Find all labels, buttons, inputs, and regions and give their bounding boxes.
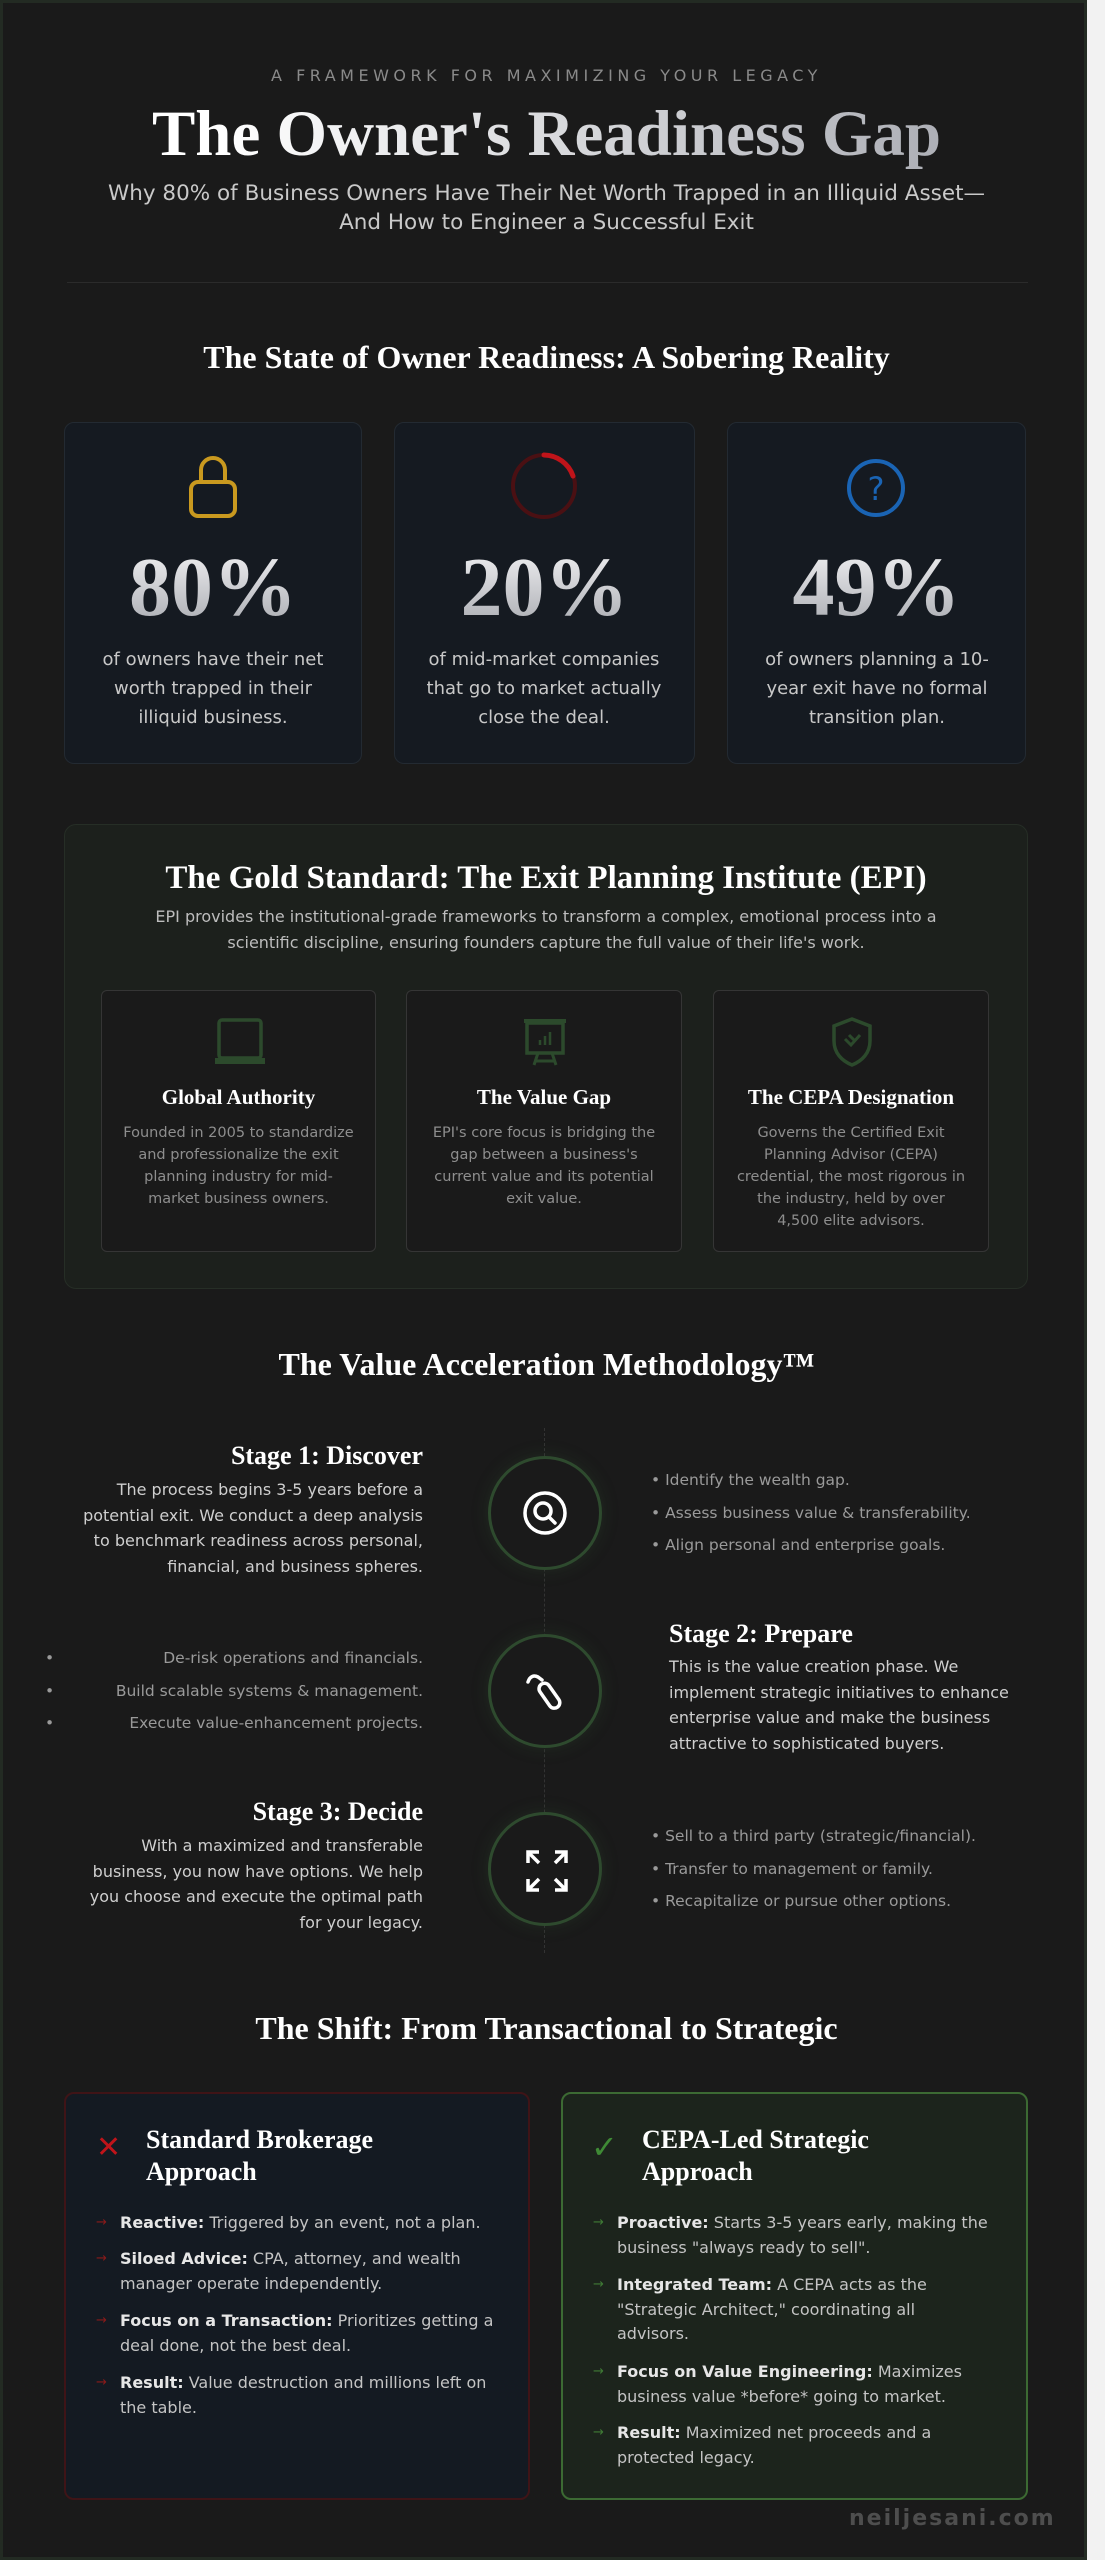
text: of owners have their net worth trapped in their illiquid business. xyxy=(103,649,323,728)
list: stage 2 bullets: • xyxy=(45,1682,54,1700)
subcard: value gap xyxy=(406,990,682,1252)
panel: CEPA-led strategic: Proactive: Starts 3-5 years early, making the business "always ready to sell". xyxy=(617,2213,988,2256)
panel: standard brokerage xyxy=(64,2092,530,2500)
subcard: CEPA designation: Governs the Certified Exit Planning Advisor (CEPA) credential, the most rigorous in the industry, held by over 4,500 elite advisors. xyxy=(737,1125,965,1229)
subtitle xyxy=(108,181,985,235)
list: stage 1 bullets: • Assess business value & transferability. xyxy=(651,1504,971,1522)
list: stage 2 bullets: De-risk operations and financials. xyxy=(163,1649,423,1667)
stat card: 80% xyxy=(64,422,362,764)
icon: cross: ✕ xyxy=(96,2130,121,2165)
list: stage 3 bullets xyxy=(651,1827,976,1910)
panel: standard brokerage: Approach xyxy=(146,2157,257,2186)
subcard: global authority: Founded in 2005 to standardize and professionalize the exit planning industry for mid-market business owners. xyxy=(123,1125,354,1207)
icon: shield xyxy=(832,1017,872,1067)
watermark: neiljesani.com xyxy=(849,2506,1056,2531)
title: The Owner's Readiness Gap xyxy=(152,98,941,170)
list: stage 2 bullets: • xyxy=(45,1649,54,1667)
section heading: the shift: The Shift: From Transactional to Strategic xyxy=(255,2010,838,2046)
panel: standard brokerage: Result: Value destruction and millions left on the table. xyxy=(120,2373,486,2416)
panel: CEPA-led strategic: Focus on Value Engineering: Maximizes business value *before* going to market. xyxy=(617,2362,962,2406)
subcard: value gap: The Value Gap xyxy=(477,1085,611,1109)
text: 20% xyxy=(460,541,628,634)
icon: presentation board xyxy=(524,1019,566,1066)
icon: check: ✓ xyxy=(591,2128,618,2166)
icon: search circle xyxy=(488,1456,602,1570)
panel: standard brokerage: Focus on a Transaction: Prioritizes getting a deal done, not the best deal. xyxy=(120,2311,493,2354)
text: of owners planning a 10-year exit have no formal transition plan. xyxy=(765,649,989,728)
panel: standard brokerage: Standard Brokerage xyxy=(146,2125,373,2154)
panel: standard brokerage: → xyxy=(96,2313,107,2328)
eyebrow text: A FRAMEWORK FOR MAXIMIZING YOUR LEGACY xyxy=(271,66,822,85)
title xyxy=(3,95,1090,173)
icon: question xyxy=(847,459,905,517)
panel: CEPA-led strategic: → xyxy=(593,2215,604,2230)
stage 2: Stage 2: Prepare xyxy=(669,1619,853,1648)
subtitle: And How to Engineer a Successful Exit xyxy=(339,210,754,235)
stage 3: With a maximized and transferable business, you now have options. We help you choose and execute the optimal path for your legacy. xyxy=(90,1836,423,1932)
stat card: 49% xyxy=(727,422,1026,764)
panel: standard brokerage: → xyxy=(96,2375,107,2390)
list: stage 3 bullets: • Transfer to management or family. xyxy=(651,1860,933,1878)
panel: CEPA-led strategic: → xyxy=(593,2425,604,2440)
subcard: global authority xyxy=(101,990,376,1252)
stage 1: Stage 1: Discover xyxy=(231,1441,423,1470)
panel: standard brokerage: → xyxy=(96,2251,107,2266)
list: stage 2 bullets: Build scalable systems & management. xyxy=(116,1682,423,1700)
icon: laptop xyxy=(215,1018,265,1064)
panel: CEPA-led strategic: CEPA-Led Strategic xyxy=(642,2125,869,2154)
panel: CEPA-led strategic: Integrated Team: A CEPA acts as the "Strategic Architect," coordinating all advisors. xyxy=(617,2275,927,2343)
panel: CEPA-led strategic: → xyxy=(593,2277,604,2292)
stage 2: This is the value creation phase. We implement strategic initiatives to enhance enterprise value and make the business attractive to sophisticated buyers. xyxy=(669,1657,1009,1752)
subcard: CEPA designation xyxy=(713,990,989,1252)
panel: CEPA-led strategic: Result: Maximized net proceeds and a protected legacy. xyxy=(617,2423,931,2466)
stage 1: The process begins 3-5 years before a potential exit. We conduct a deep analysis to benchmark readiness across personal, financial, and business spheres. xyxy=(83,1480,423,1576)
panel: CEPA-led strategic: Approach xyxy=(642,2157,753,2186)
icon: question: ? xyxy=(868,470,884,508)
panel: EPI gold standard xyxy=(64,824,1028,1289)
list: stage 2 bullets: • xyxy=(45,1714,54,1732)
text: 80% xyxy=(129,541,297,634)
list: stage 1 bullets: • Identify the wealth gap. xyxy=(651,1471,850,1489)
list: stage 1 bullets: • Align personal and enterprise goals. xyxy=(651,1536,945,1554)
icon: progress ring xyxy=(511,452,577,519)
subcard: global authority: Global Authority xyxy=(162,1085,315,1109)
list: stage 2 bullets xyxy=(45,1649,423,1732)
stat card: 20% xyxy=(394,422,695,764)
panel: CEPA-led strategic: → xyxy=(593,2364,604,2379)
text: of mid-market companies that go to market actually close the deal. xyxy=(427,649,661,728)
icon: tool circle xyxy=(488,1634,602,1748)
panel: CEPA-led strategic xyxy=(561,2092,1028,2500)
list: stage 3 bullets: • Recapitalize or pursue other options. xyxy=(651,1892,951,1910)
icon: expand circle xyxy=(488,1812,602,1926)
section heading: state of readiness: The State of Owner Readiness: A Sobering Reality xyxy=(203,339,890,375)
panel: standard brokerage: → xyxy=(96,2215,107,2230)
section heading: methodology: The Value Acceleration Methodology™ xyxy=(279,1346,814,1382)
text: 49% xyxy=(792,541,960,634)
icon: lock xyxy=(189,456,237,518)
list: stage 1 bullets xyxy=(651,1471,971,1554)
subcard: value gap: EPI's core focus is bridging the gap between a business's current value and its potential exit value. xyxy=(433,1125,655,1207)
list: stage 3 bullets: • Sell to a third party (strategic/financial). xyxy=(651,1827,976,1845)
stage 3: Stage 3: Decide xyxy=(253,1797,423,1826)
panel: standard brokerage: Reactive: Triggered by an event, not a plan. xyxy=(120,2213,481,2232)
panel: standard brokerage: Siloed Advice: CPA, attorney, and wealth manager operate independently. xyxy=(120,2249,461,2292)
subcard: CEPA designation: The CEPA Designation xyxy=(748,1085,954,1109)
subtitle: Why 80% of Business Owners Have Their Net Worth Trapped in an Illiquid Asset— xyxy=(108,181,985,206)
list: stage 2 bullets: Execute value-enhancement projects. xyxy=(129,1714,423,1732)
text: EPI description: EPI provides the institutional-grade frameworks to transform a complex, emotional process into a scientific discipline, ensuring founders capture the full value of their life's work. xyxy=(155,907,937,952)
heading: gold standard: The Gold Standard: The Exit Planning Institute (EPI) xyxy=(165,860,927,896)
